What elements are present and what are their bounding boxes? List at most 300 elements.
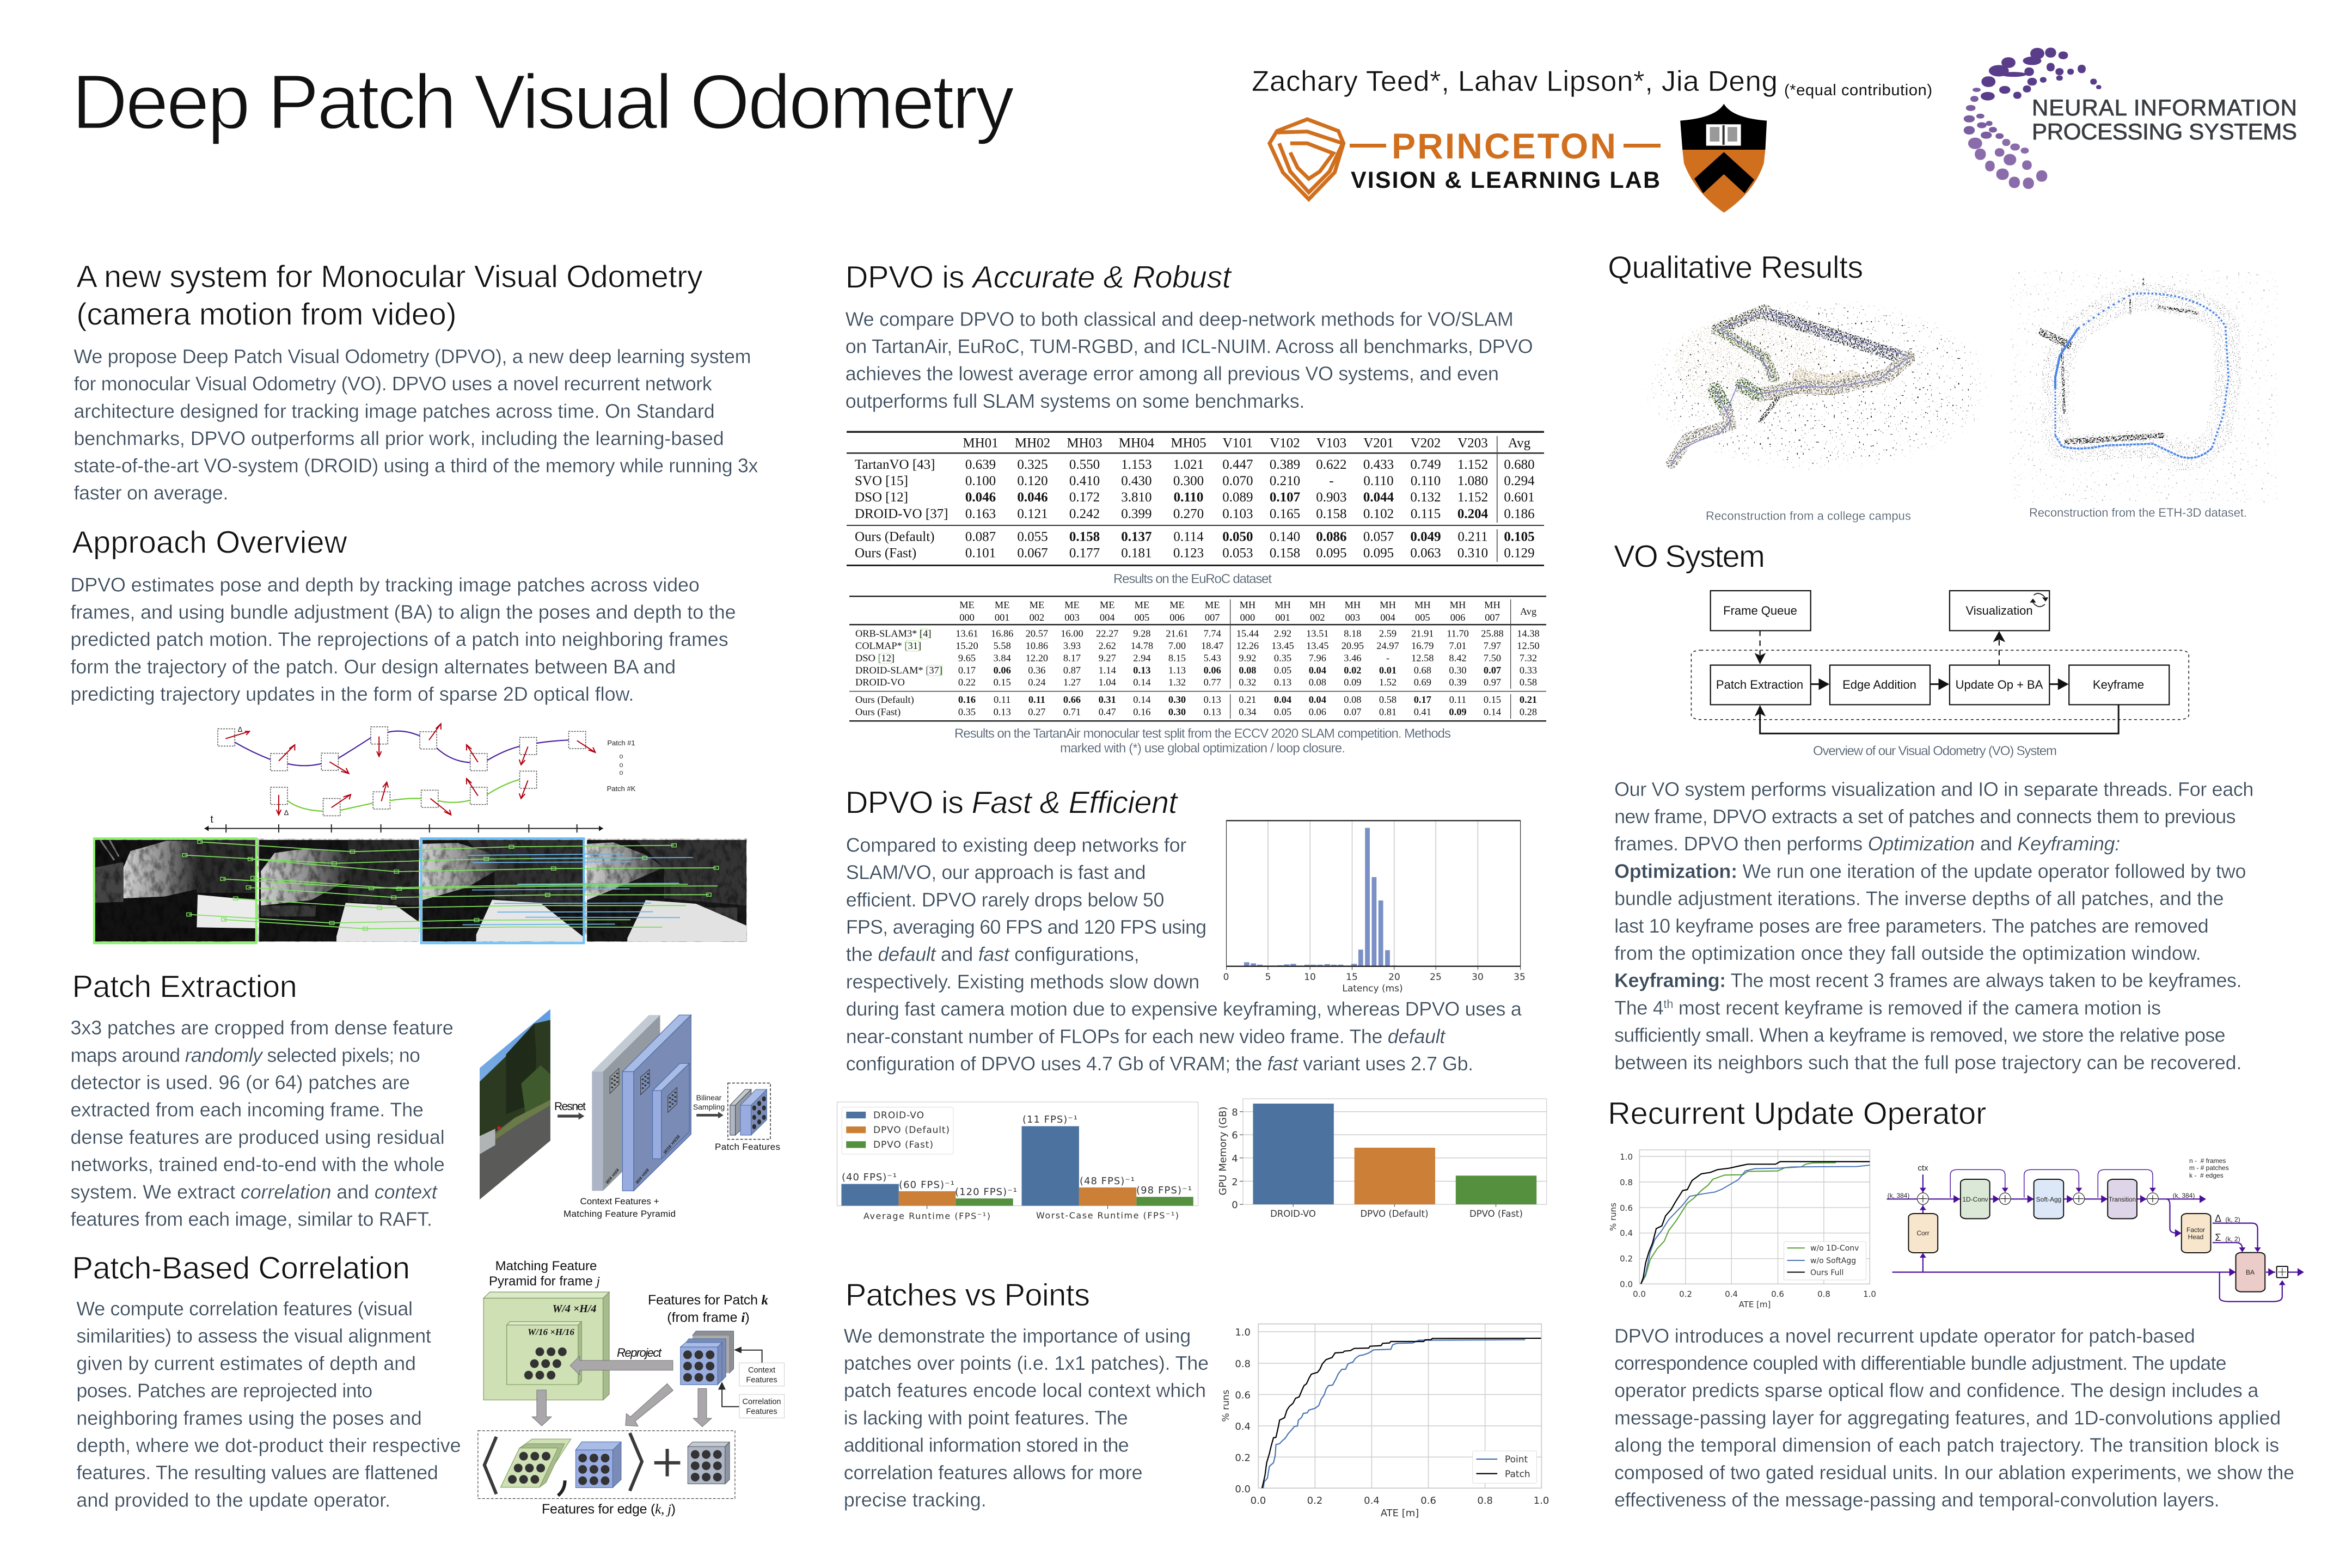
text block: VO system: from the optimization once they fall outside the optimization window.	[1614, 942, 2201, 964]
text block: patch-based correlation: We compute correlation features (visual	[76, 1298, 413, 1320]
table: TartanAir results: 005	[1135, 612, 1149, 623]
chart: runtime bars: DROID-VO	[873, 1110, 924, 1121]
text block: approach overview: frames, and using bundle adjustment (BA) to align the poses and depth to the	[70, 602, 736, 623]
text block: new system: architecture designed for tracking image patches across time. On Standard	[74, 400, 715, 422]
table: TartanAir results: ME	[1205, 599, 1220, 610]
chart: latency histogram	[1223, 820, 1526, 994]
table: EuRoC results: 0.095	[1363, 546, 1394, 560]
diagram: correlation features: Features for Patch k	[648, 1293, 769, 1308]
text block: new system: faster on average.	[74, 482, 228, 504]
text block: patch extraction: dense features are produced using residual	[70, 1126, 445, 1148]
table: TartanAir results: 9.28	[1133, 628, 1150, 639]
diagram: patch trajectories: Δ	[284, 808, 289, 817]
table: EuRoC results: 0.110	[1174, 490, 1203, 505]
chart: runtime bars: (48 FPS)⁻¹	[1080, 1175, 1135, 1187]
table: TartanAir results: Avg	[1520, 606, 1536, 617]
text block: patches vs points: is lacking with point features. The	[844, 1407, 1128, 1429]
table: TartanAir results: 5.58	[994, 640, 1011, 651]
chart: ablation ATE: 0.6	[1620, 1203, 1633, 1213]
table: EuRoC results: 0.158	[1069, 529, 1100, 544]
table: EuRoC results: 0.046	[1017, 490, 1048, 505]
diagram: feature extraction network: W/4 ×H/4	[605, 1167, 620, 1185]
figure: ETH-3D reconstruction	[2010, 271, 2277, 503]
diagram: feature extraction network: W/16 ×H/16	[663, 1134, 681, 1155]
table: TartanAir results: 0.21	[1239, 694, 1256, 705]
text block: patch-based correlation: and provided to the update operator.	[76, 1489, 390, 1511]
caption: TartanAir: marked with (*) use global optimization / loop closure.	[1060, 741, 1345, 756]
table: TartanAir results: 0.06	[994, 665, 1011, 676]
chart: latency histogram: 35	[1514, 972, 1526, 983]
diagram: patch trajectories: o	[619, 761, 623, 769]
table: TartanAir results: 12.50	[1517, 640, 1540, 651]
table: EuRoC results: 0.181	[1121, 546, 1152, 560]
table: TartanAir results: 005	[1415, 612, 1430, 623]
chart: ablation ATE	[1608, 1150, 1876, 1309]
heading: VO system: VO System	[1614, 540, 1765, 574]
logo: NeurIPS: PROCESSING SYSTEMS	[2032, 119, 2297, 144]
text block: recurrent update operator: correspondence coupled with differentiable bundle adjustment. The update	[1614, 1352, 2227, 1374]
diagram: recurrent update operator: Σ	[2215, 1232, 2221, 1243]
table: TartanAir results: DROID-VO	[855, 677, 905, 688]
text block: patch extraction: detector is used. 96 (or 64) patches are	[70, 1071, 410, 1093]
chart: GPU memory bars	[1217, 1099, 1547, 1219]
table: EuRoC results: V103	[1316, 436, 1346, 451]
table: EuRoC results: TartanVO [43]	[855, 457, 935, 472]
table: TartanAir results: 0.66	[1063, 694, 1081, 705]
figure: college campus reconstruction	[1643, 298, 1996, 472]
table: EuRoC results: 0.680	[1504, 457, 1535, 472]
panel: recurrent update operator	[1608, 1096, 2304, 1511]
table: TartanAir results: Ours (Fast)	[855, 707, 901, 718]
diagram: correlation features	[478, 1259, 785, 1517]
table: TartanAir results: 003	[1345, 612, 1360, 623]
table: EuRoC results: 0.172	[1069, 490, 1100, 505]
diagram: correlation features: Features	[746, 1407, 777, 1416]
chart: patch vs point ATE: 0.6	[1235, 1389, 1251, 1401]
table: EuRoC results: 0.103	[1222, 507, 1253, 522]
table: TartanAir results: 16.86	[991, 628, 1013, 639]
text block: patch extraction: networks, trained end-to-end with the whole	[70, 1154, 445, 1175]
text block: VO system: Optimization: We run one iteration of the update operator followed by two	[1614, 860, 2246, 882]
text block: recurrent update operator: DPVO introduces a novel recurrent update operator for patch-based	[1614, 1325, 2195, 1347]
table: TartanAir results: 0.28	[1520, 707, 1537, 718]
table: EuRoC results: 0.050	[1222, 529, 1253, 544]
table: TartanAir results: 0.47	[1099, 707, 1116, 718]
diagram: patch trajectories: o	[619, 752, 623, 760]
table: TartanAir results: ME	[995, 599, 1009, 610]
chart: ablation ATE: 0.0	[1633, 1289, 1646, 1299]
chart: runtime bars: (98 FPS)⁻¹	[1136, 1185, 1192, 1196]
chart: runtime bars	[837, 1102, 1198, 1221]
table: TartanAir results: 7.01	[1449, 640, 1467, 651]
table: TartanAir results: 0.14	[1133, 694, 1150, 705]
table: TartanAir results: 2.92	[1274, 628, 1291, 639]
text block: recurrent update operator: along the temporal dimension of each patch trajectory. The transition block is	[1614, 1435, 2279, 1456]
table: EuRoC results: 0.204	[1457, 507, 1489, 522]
text block: fast and efficient: respectively. Existing methods slow down	[846, 971, 1199, 993]
table: TartanAir results: 12.58	[1411, 652, 1434, 663]
heading: patch-based correlation: Patch-Based Correlation	[72, 1251, 410, 1285]
chart: runtime bars: (40 FPS)⁻¹	[842, 1172, 897, 1183]
table: EuRoC results: 0.294	[1504, 474, 1535, 488]
table: EuRoC results: 0.325	[1017, 457, 1048, 472]
table: EuRoC results: Ours (Default)	[855, 529, 934, 544]
logo: Princeton vision and learning lab: VISION & LEARNING LAB	[1351, 167, 1660, 193]
table: EuRoC results: 0.430	[1121, 474, 1152, 488]
text block: patches vs points: patches over points (i.e. 1x1 patches). The	[844, 1352, 1209, 1374]
table: TartanAir results: 8.17	[1063, 652, 1081, 663]
table: TartanAir results: 18.47	[1201, 640, 1223, 651]
text block: new system: for monocular Visual Odometry (VO). DPVO uses a novel recurrent network	[74, 373, 712, 395]
caption: ETH-3D: Reconstruction from the ETH-3D dataset.	[2029, 506, 2247, 519]
table: EuRoC results: 0.903	[1316, 490, 1347, 505]
table: TartanAir results: 0.16	[1133, 707, 1150, 718]
table: TartanAir results: 5.43	[1204, 652, 1221, 663]
table: TartanAir results: MH	[1414, 599, 1431, 610]
chart: patch vs point ATE: 0.4	[1364, 1495, 1380, 1506]
table: TartanAir results: 0.34	[1239, 707, 1256, 718]
diagram: recurrent update operator: n - # frames	[2189, 1157, 2226, 1165]
text block: patch-based correlation	[76, 1298, 461, 1511]
table: EuRoC results: 0.310	[1457, 546, 1488, 560]
text block: patches vs points: precise tracking.	[844, 1489, 987, 1511]
table: TartanAir results: 007	[1485, 612, 1500, 623]
table: TartanAir results: 0.05	[1274, 707, 1291, 718]
table: TartanAir results: 12.20	[1026, 652, 1048, 663]
text block: VO system: frames. DPVO then performs Optimization and Keyframing:	[1614, 833, 2120, 855]
chart: latency histogram: 0	[1223, 972, 1229, 983]
diagram: VO system flow: Update Op + BA	[1956, 678, 2043, 691]
table: TartanAir results: 21.61	[1166, 628, 1189, 639]
table: TartanAir results: 0.01	[1379, 665, 1396, 676]
table: TartanAir results: 0.13	[1274, 677, 1291, 688]
table: EuRoC results: 0.110	[1363, 474, 1394, 488]
diagram: correlation features: Reproject	[617, 1346, 662, 1359]
text block: accurate and robust: achieves the lowest average error among all previous VO systems, and even	[846, 363, 1499, 385]
diagram: VO system flow: Keyframe	[2093, 678, 2144, 691]
table: TartanAir results: 7.97	[1484, 640, 1501, 651]
table: TartanAir results: 15.20	[955, 640, 978, 651]
table: TartanAir results: 1.27	[1063, 677, 1081, 688]
table: EuRoC results: 0.129	[1504, 546, 1535, 560]
heading: recurrent update operator: Recurrent Update Operator	[1608, 1096, 1986, 1131]
diagram: recurrent update operator: 1D-Conv	[1962, 1196, 1988, 1203]
chart: runtime bars: Worst-Case Runtime (FPS⁻¹)	[1036, 1210, 1179, 1221]
chart: runtime bars: (11 FPS)⁻¹	[1022, 1114, 1077, 1125]
table: TartanAir results: ORB-SLAM3* [4]	[855, 628, 931, 639]
table: EuRoC results: 0.044	[1363, 490, 1394, 505]
diagram: recurrent update operator: (k, 384)	[1888, 1192, 1909, 1199]
table: EuRoC results: 0.550	[1069, 457, 1100, 472]
text block: patch extraction: system. We extract correlation and context	[70, 1181, 438, 1203]
chart: runtime bars: (120 FPS)⁻¹	[955, 1186, 1017, 1198]
table: EuRoC results: 0.101	[965, 546, 996, 560]
table: TartanAir results: 0.30	[1449, 665, 1467, 676]
table: TartanAir results: 0.31	[1099, 694, 1116, 705]
heading: qualitative results: Qualitative Results	[1608, 250, 1863, 285]
image strip: tracked patches	[94, 838, 750, 945]
table: TartanAir results: 2.62	[1099, 640, 1116, 651]
table: EuRoC results: 0.433	[1363, 457, 1394, 472]
table: TartanAir results: 0.04	[1274, 694, 1291, 705]
text block: patch-based correlation: features. The resulting values are flattened	[76, 1462, 438, 1484]
table: EuRoC results: 0.110	[1411, 474, 1441, 488]
table: EuRoC results	[847, 431, 1544, 566]
table: TartanAir results: 0.30	[1168, 707, 1186, 718]
table: TartanAir results: 0.16	[958, 694, 976, 705]
chart: patch vs point ATE: 0.0	[1235, 1484, 1251, 1495]
table: EuRoC results: MH04	[1119, 436, 1155, 451]
diagram: VO system flow: Patch Extraction	[1716, 678, 1803, 691]
chart: latency histogram: 10	[1304, 972, 1316, 983]
table: EuRoC results: DSO [12]	[855, 490, 908, 505]
table: TartanAir results: 0.24	[1028, 677, 1045, 688]
table: TartanAir results: MH	[1309, 599, 1326, 610]
table: TartanAir results: 0.08	[1309, 677, 1326, 688]
table: TartanAir results: 0.13	[1204, 694, 1221, 705]
text block: VO system: last 10 keyframe poses are free parameters. The patches are removed	[1614, 915, 2209, 937]
table: TartanAir results: 0.97	[1484, 677, 1501, 688]
text block: patch-based correlation: neighboring frames using the poses and	[76, 1407, 422, 1429]
chart: latency histogram: 25	[1430, 972, 1442, 983]
panel: fast and efficient	[837, 786, 1547, 1221]
table: EuRoC results: 0.749	[1410, 457, 1441, 472]
text block: VO system: Our VO system performs visualization and IO in separate threads. For each	[1614, 779, 2253, 800]
table: TartanAir results: 003	[1064, 612, 1080, 623]
chart: patch vs point ATE	[1221, 1324, 1549, 1519]
table: EuRoC results: 0.067	[1017, 546, 1048, 560]
table: EuRoC results: 0.049	[1410, 529, 1441, 544]
table: EuRoC results: 1.021	[1173, 457, 1204, 472]
chart: ablation ATE: w/o SoftAgg	[1810, 1257, 1856, 1265]
chart: ablation ATE: 0.8	[1620, 1178, 1633, 1187]
table: TartanAir results: 0.14	[1133, 677, 1150, 688]
heading: new system: A new system for Monocular Visual Odometry	[76, 260, 703, 295]
text block: recurrent update operator	[1614, 1325, 2294, 1511]
table: TartanAir results: 25.88	[1481, 628, 1504, 639]
table: TartanAir results: 0.09	[1344, 677, 1361, 688]
chart: GPU memory bars: 4	[1232, 1153, 1238, 1165]
text block: approach overview: form the trajectory of the patch. Our design alternates between BA and	[70, 656, 676, 678]
diagram: recurrent update operator: Δ	[2215, 1213, 2221, 1224]
chart: ablation ATE: % runs	[1608, 1203, 1618, 1231]
chart: patch vs point ATE: 0.2	[1235, 1453, 1251, 1463]
table: TartanAir results: 0.21	[1520, 694, 1537, 705]
heading: accurate and robust: DPVO is Accurate & Robust	[846, 260, 1233, 295]
table: TartanAir results: 0.13	[1204, 707, 1221, 718]
text block: VO system	[1614, 779, 2253, 1074]
text block: new system: benchmarks, DPVO outperforms all prior work, including the learning-based	[74, 427, 724, 449]
table: EuRoC results: 0.046	[965, 490, 996, 505]
logo: NeurIPS	[1965, 48, 2297, 189]
table: TartanAir results: 8.15	[1168, 652, 1186, 663]
heading: patches vs points: Patches vs Points	[846, 1278, 1090, 1313]
chart: runtime bars: DPVO (Default)	[873, 1125, 950, 1136]
logo: Princeton vision and learning lab	[1270, 119, 1661, 199]
table: EuRoC results: 0.089	[1222, 490, 1253, 505]
table: EuRoC results: MH01	[963, 436, 999, 451]
text block: fast and efficient: the default and fast configurations,	[846, 944, 1140, 965]
diagram: recurrent update operator: Head	[2188, 1233, 2203, 1241]
table: EuRoC results: 0.601	[1504, 490, 1535, 505]
table: TartanAir results: ME	[1064, 599, 1080, 610]
text block: patch-based correlation: similarities) to assess the visual alignment	[76, 1325, 431, 1347]
table: TartanAir results: 004	[1380, 612, 1395, 623]
diagram: patch trajectories: Patch #K	[607, 785, 636, 793]
text block: fast and efficient: Compared to existing deep networks for	[846, 834, 1186, 856]
diagram: correlation features: Context	[748, 1366, 775, 1375]
chart: GPU memory bars: GPU Memory (GB)	[1217, 1107, 1229, 1195]
text block: recurrent update operator: message-passing layer for aggregating features, and 1D-convolutions applied	[1614, 1407, 2281, 1429]
diagram: VO system flow	[1691, 591, 2189, 733]
text block: fast and efficient: near-constant number of FLOPs for each new video frame. The default	[846, 1026, 1446, 1048]
table: EuRoC results: 0.242	[1069, 507, 1100, 522]
diagram: feature extraction network: Matching Feature Pyramid	[564, 1209, 676, 1219]
heading: new system	[76, 260, 703, 332]
table: EuRoC results: 0.211	[1457, 529, 1488, 544]
text block: patch extraction	[70, 1017, 454, 1230]
table: TartanAir results: 0.11	[1028, 694, 1045, 705]
table: TartanAir results: 0.04	[1309, 665, 1326, 676]
table: EuRoC results: 0.186	[1504, 507, 1535, 522]
table: TartanAir results: MH	[1275, 599, 1291, 610]
table: TartanAir results: 0.13	[994, 707, 1011, 718]
table: TartanAir results: 0.68	[1414, 665, 1431, 676]
text block: approach overview	[70, 574, 736, 705]
chart: GPU memory bars: 8	[1232, 1107, 1238, 1118]
table: EuRoC results: 0.107	[1270, 490, 1300, 505]
diagram: recurrent update operator	[1886, 1157, 2304, 1302]
table: TartanAir results: 0.81	[1379, 707, 1396, 718]
text block: patch extraction: features from each image, similar to RAFT.	[70, 1208, 432, 1230]
table: EuRoC results: 0.389	[1270, 457, 1300, 472]
table: TartanAir results: DSO [12]	[855, 652, 895, 663]
chart: runtime bars: DPVO (Fast)	[873, 1140, 933, 1150]
diagram: recurrent update operator: (k, 2)	[2225, 1235, 2240, 1243]
diagram: VO system flow: Visualization	[1965, 604, 2033, 617]
text block: approach overview: predicting trajectory updates in the form of sparse 2D optical flow.	[70, 683, 634, 705]
chart: GPU memory bars: DPVO (Default)	[1360, 1209, 1429, 1219]
table: TartanAir results: 002	[1030, 612, 1044, 623]
table: EuRoC results: 0.137	[1121, 529, 1152, 544]
chart: ablation ATE: 0.6	[1771, 1289, 1784, 1299]
chart: patch vs point ATE: % runs	[1221, 1389, 1232, 1422]
table: TartanAir results: 004	[1100, 612, 1114, 623]
chart: patch vs point ATE: 0.0	[1251, 1495, 1266, 1506]
table: TartanAir results: MH	[1240, 599, 1255, 610]
table: TartanAir results: 0.06	[1309, 707, 1326, 718]
table: TartanAir results: 1.32	[1168, 677, 1186, 688]
text block: recurrent update operator: composed of two gated residual units. In our ablation experiments, we show the	[1614, 1462, 2294, 1484]
table: TartanAir results: 0.07	[1484, 665, 1501, 676]
table: TartanAir results: 15.44	[1236, 628, 1259, 639]
caption: TartanAir	[954, 726, 1451, 756]
table: EuRoC results: 0.070	[1222, 474, 1253, 488]
table: EuRoC results: 0.123	[1173, 546, 1204, 560]
table: TartanAir results: 20.57	[1026, 628, 1048, 639]
table: TartanAir results: 0.87	[1063, 665, 1081, 676]
text block: patches vs points: correlation features allows for more	[844, 1462, 1143, 1484]
table: TartanAir results: 7.50	[1484, 652, 1501, 663]
table: EuRoC results: 0.639	[965, 457, 996, 472]
chart: ablation ATE: 0.2	[1620, 1254, 1633, 1264]
table: TartanAir results: 1.52	[1379, 677, 1396, 688]
text block: patch extraction: extracted from each incoming frame. The	[70, 1099, 424, 1121]
table: TartanAir results: 0.13	[1133, 665, 1150, 676]
text block: VO system: sufficiently small. When a keyframe is removed, we store the relative pose	[1614, 1025, 2226, 1046]
table: TartanAir results: 16.79	[1411, 640, 1434, 651]
chart: ablation ATE: ATE [m]	[1739, 1300, 1771, 1309]
table: TartanAir results: ME	[1030, 599, 1044, 610]
table: TartanAir results: 2.94	[1133, 652, 1150, 663]
chart: ablation ATE: 0.8	[1817, 1289, 1830, 1299]
diagram: correlation features: (from frame i)	[667, 1310, 750, 1325]
table: TartanAir results: 14.38	[1517, 628, 1540, 639]
table: EuRoC results: MH05	[1171, 436, 1206, 451]
chart: ablation ATE: Ours Full	[1810, 1269, 1843, 1277]
table: EuRoC results: 0.158	[1316, 507, 1347, 522]
diagram: recurrent update operator: m - # patches	[2189, 1164, 2229, 1172]
table: EuRoC results: 0.086	[1316, 529, 1347, 544]
table: EuRoC results: 0.177	[1069, 546, 1100, 560]
table: TartanAir results: MH	[1345, 599, 1361, 610]
table: TartanAir results: 8.42	[1449, 652, 1467, 663]
table: EuRoC results: 1.152	[1457, 490, 1488, 505]
diagram: feature extraction network	[480, 1009, 780, 1219]
table: EuRoC results: 0.410	[1069, 474, 1100, 488]
text block: patches vs points	[844, 1325, 1209, 1511]
table: TartanAir results: 0.17	[958, 665, 976, 676]
diagram: patch trajectories	[205, 724, 636, 832]
caption: college campus: Reconstruction from a college campus	[1706, 509, 1911, 523]
table: EuRoC results: -	[1329, 474, 1334, 488]
diagram: VO system flow: Frame Queue	[1723, 604, 1797, 617]
table: TartanAir results: ME	[959, 599, 975, 610]
table: EuRoC results: 0.114	[1173, 529, 1204, 544]
table: TartanAir results: 1.13	[1168, 665, 1186, 676]
chart: patch vs point ATE: 1.0	[1534, 1495, 1549, 1506]
diagram: recurrent update operator: Soft-Agg	[2036, 1196, 2061, 1203]
text block: VO system: Keyframing: The most recent 3 frames are always taken to be keyframes.	[1614, 970, 2241, 991]
table: TartanAir results: 0.33	[1520, 665, 1537, 676]
heading: fast and efficient: DPVO is Fast & Efficient	[846, 786, 1179, 820]
table: TartanAir results: 0.77	[1204, 677, 1221, 688]
text block: new system: state-of-the-art VO-system (DROID) using a third of the memory while running 3x	[74, 455, 758, 477]
chart: patch vs point ATE: Patch	[1505, 1469, 1530, 1480]
chart: ablation ATE: 1.0	[1620, 1152, 1633, 1162]
diagram: correlation features: Matching Feature	[495, 1259, 597, 1273]
diagram: VO system flow: Edge Addition	[1842, 678, 1916, 691]
table: TartanAir results: 0.06	[1204, 665, 1221, 676]
table: EuRoC results: 0.120	[1017, 474, 1048, 488]
chart: patch vs point ATE: Point	[1505, 1454, 1528, 1465]
table: TartanAir results: 0.11	[1449, 694, 1466, 705]
table: TartanAir results: 0.08	[1239, 665, 1256, 676]
chart: ablation ATE: 0.0	[1620, 1279, 1633, 1289]
table: TartanAir results: 13.51	[1306, 628, 1328, 639]
caption: VO system: Overview of our Visual Odometry (VO) System	[1813, 744, 2057, 758]
table: EuRoC results: 0.055	[1017, 529, 1048, 544]
table: TartanAir results: 3.46	[1344, 652, 1361, 663]
text block: approach overview: predicted patch motion. The reprojections of a patch into neighboring frames	[70, 629, 728, 651]
table: TartanAir results: 9.27	[1099, 652, 1116, 663]
table: EuRoC results: 0.115	[1411, 507, 1441, 522]
chart: runtime bars: (60 FPS)⁻¹	[899, 1179, 954, 1191]
table: TartanAir results: 0.07	[1344, 707, 1361, 718]
chart: GPU memory bars: 0	[1232, 1199, 1238, 1211]
chart: patch vs point ATE: 0.4	[1235, 1421, 1251, 1432]
table: TartanAir results: 0.58	[1520, 677, 1537, 688]
